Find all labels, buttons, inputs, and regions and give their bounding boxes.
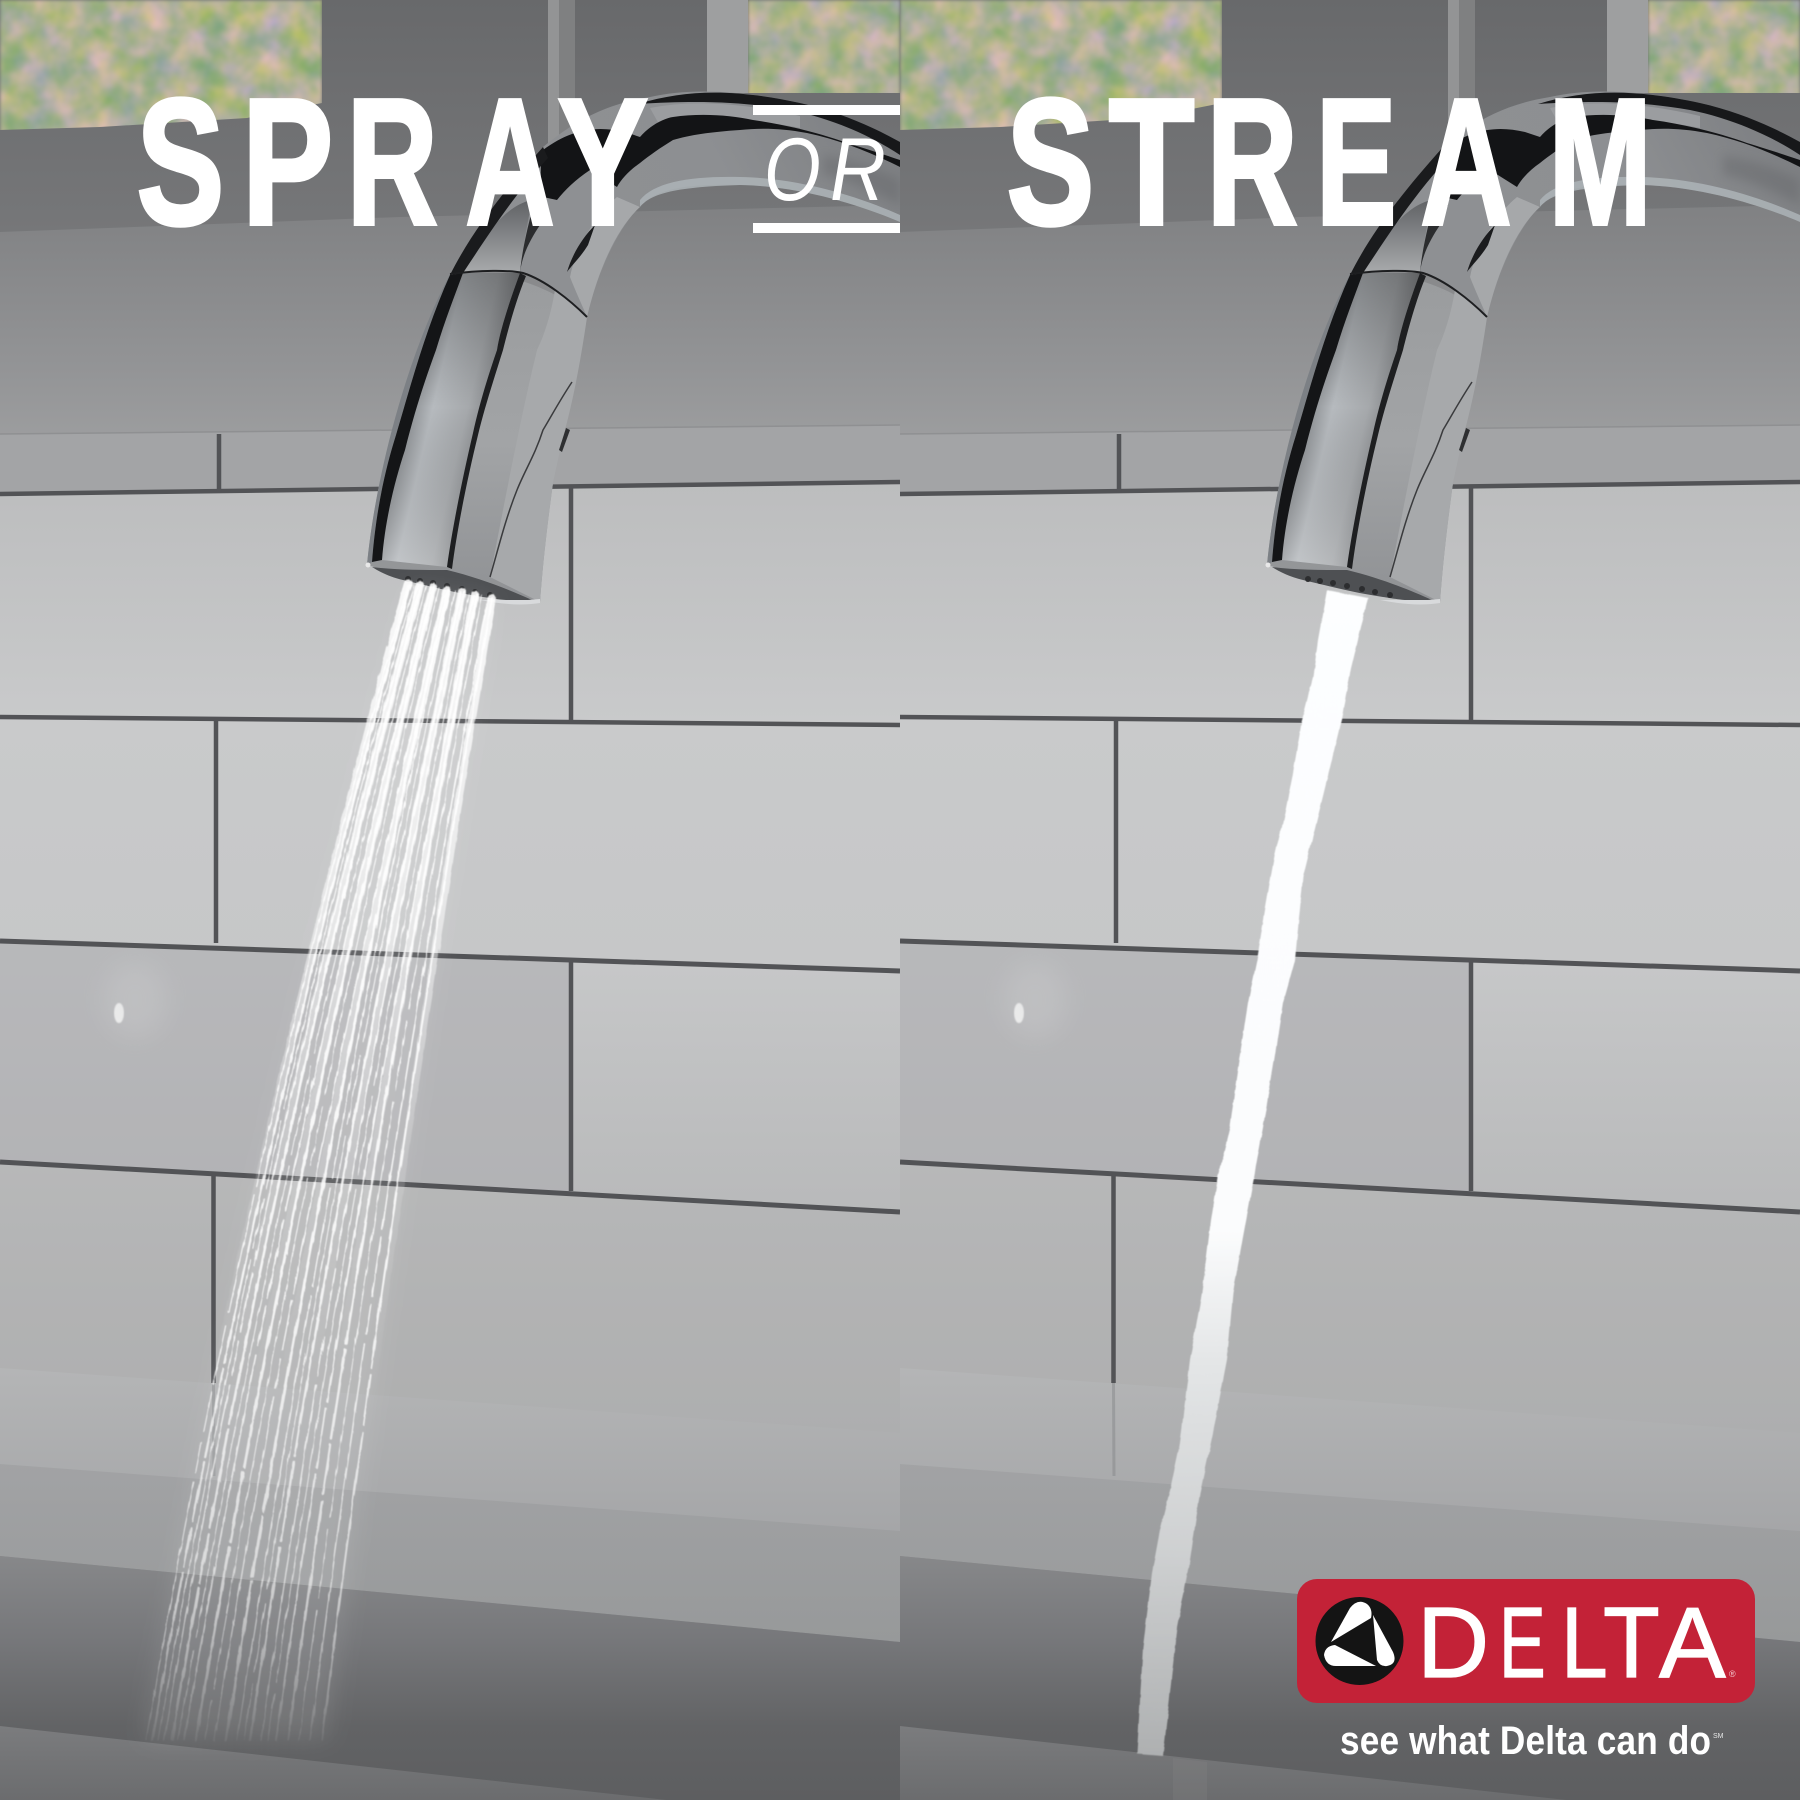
wordmark: DELTA: L (1561, 1586, 1608, 1699)
title: STREAM: T (1109, 62, 1194, 263)
title: OR between rules: R (830, 119, 886, 219)
tagline: see what Delta can do (1340, 1718, 1711, 1762)
title: OR between rules: O (764, 120, 821, 220)
title: SPRAY: Y (558, 61, 648, 262)
title: SPRAY: P (242, 61, 333, 262)
title: SPRAY: S (137, 62, 224, 263)
title: STREAM: R (1207, 61, 1298, 262)
wordmark: DELTA (1417, 1586, 1726, 1699)
title: SPRAY (137, 61, 648, 263)
wordmark: DELTA: T (1603, 1588, 1660, 1699)
wordmark: DELTA: E (1499, 1588, 1546, 1699)
title: OR between rules (753, 105, 900, 233)
spray water jets (143, 583, 494, 1740)
title: STREAM: M (1548, 61, 1652, 262)
title: STREAM (1007, 61, 1652, 263)
stream reflection on sink lip (1173, 1758, 1207, 1800)
registered mark: ® (1729, 1669, 1736, 1679)
title: STREAM: S (1007, 62, 1094, 263)
icon: Delta triangle emblem (1316, 1597, 1404, 1685)
title: STREAM: A (1420, 61, 1511, 262)
Delta logo badge (1297, 1579, 1755, 1703)
panel: stream background with faucet (900, 0, 1800, 1800)
title: SPRAY: A (466, 61, 555, 263)
wordmark: DELTA: D (1417, 1587, 1489, 1699)
title: SPRAY: R (347, 61, 438, 262)
tagline: SM (1713, 1733, 1724, 1740)
panel: spray background with faucet (0, 0, 900, 1800)
stream of water (1137, 590, 1368, 1756)
wordmark: DELTA: A (1659, 1587, 1726, 1699)
title: STREAM: E (1316, 62, 1396, 263)
